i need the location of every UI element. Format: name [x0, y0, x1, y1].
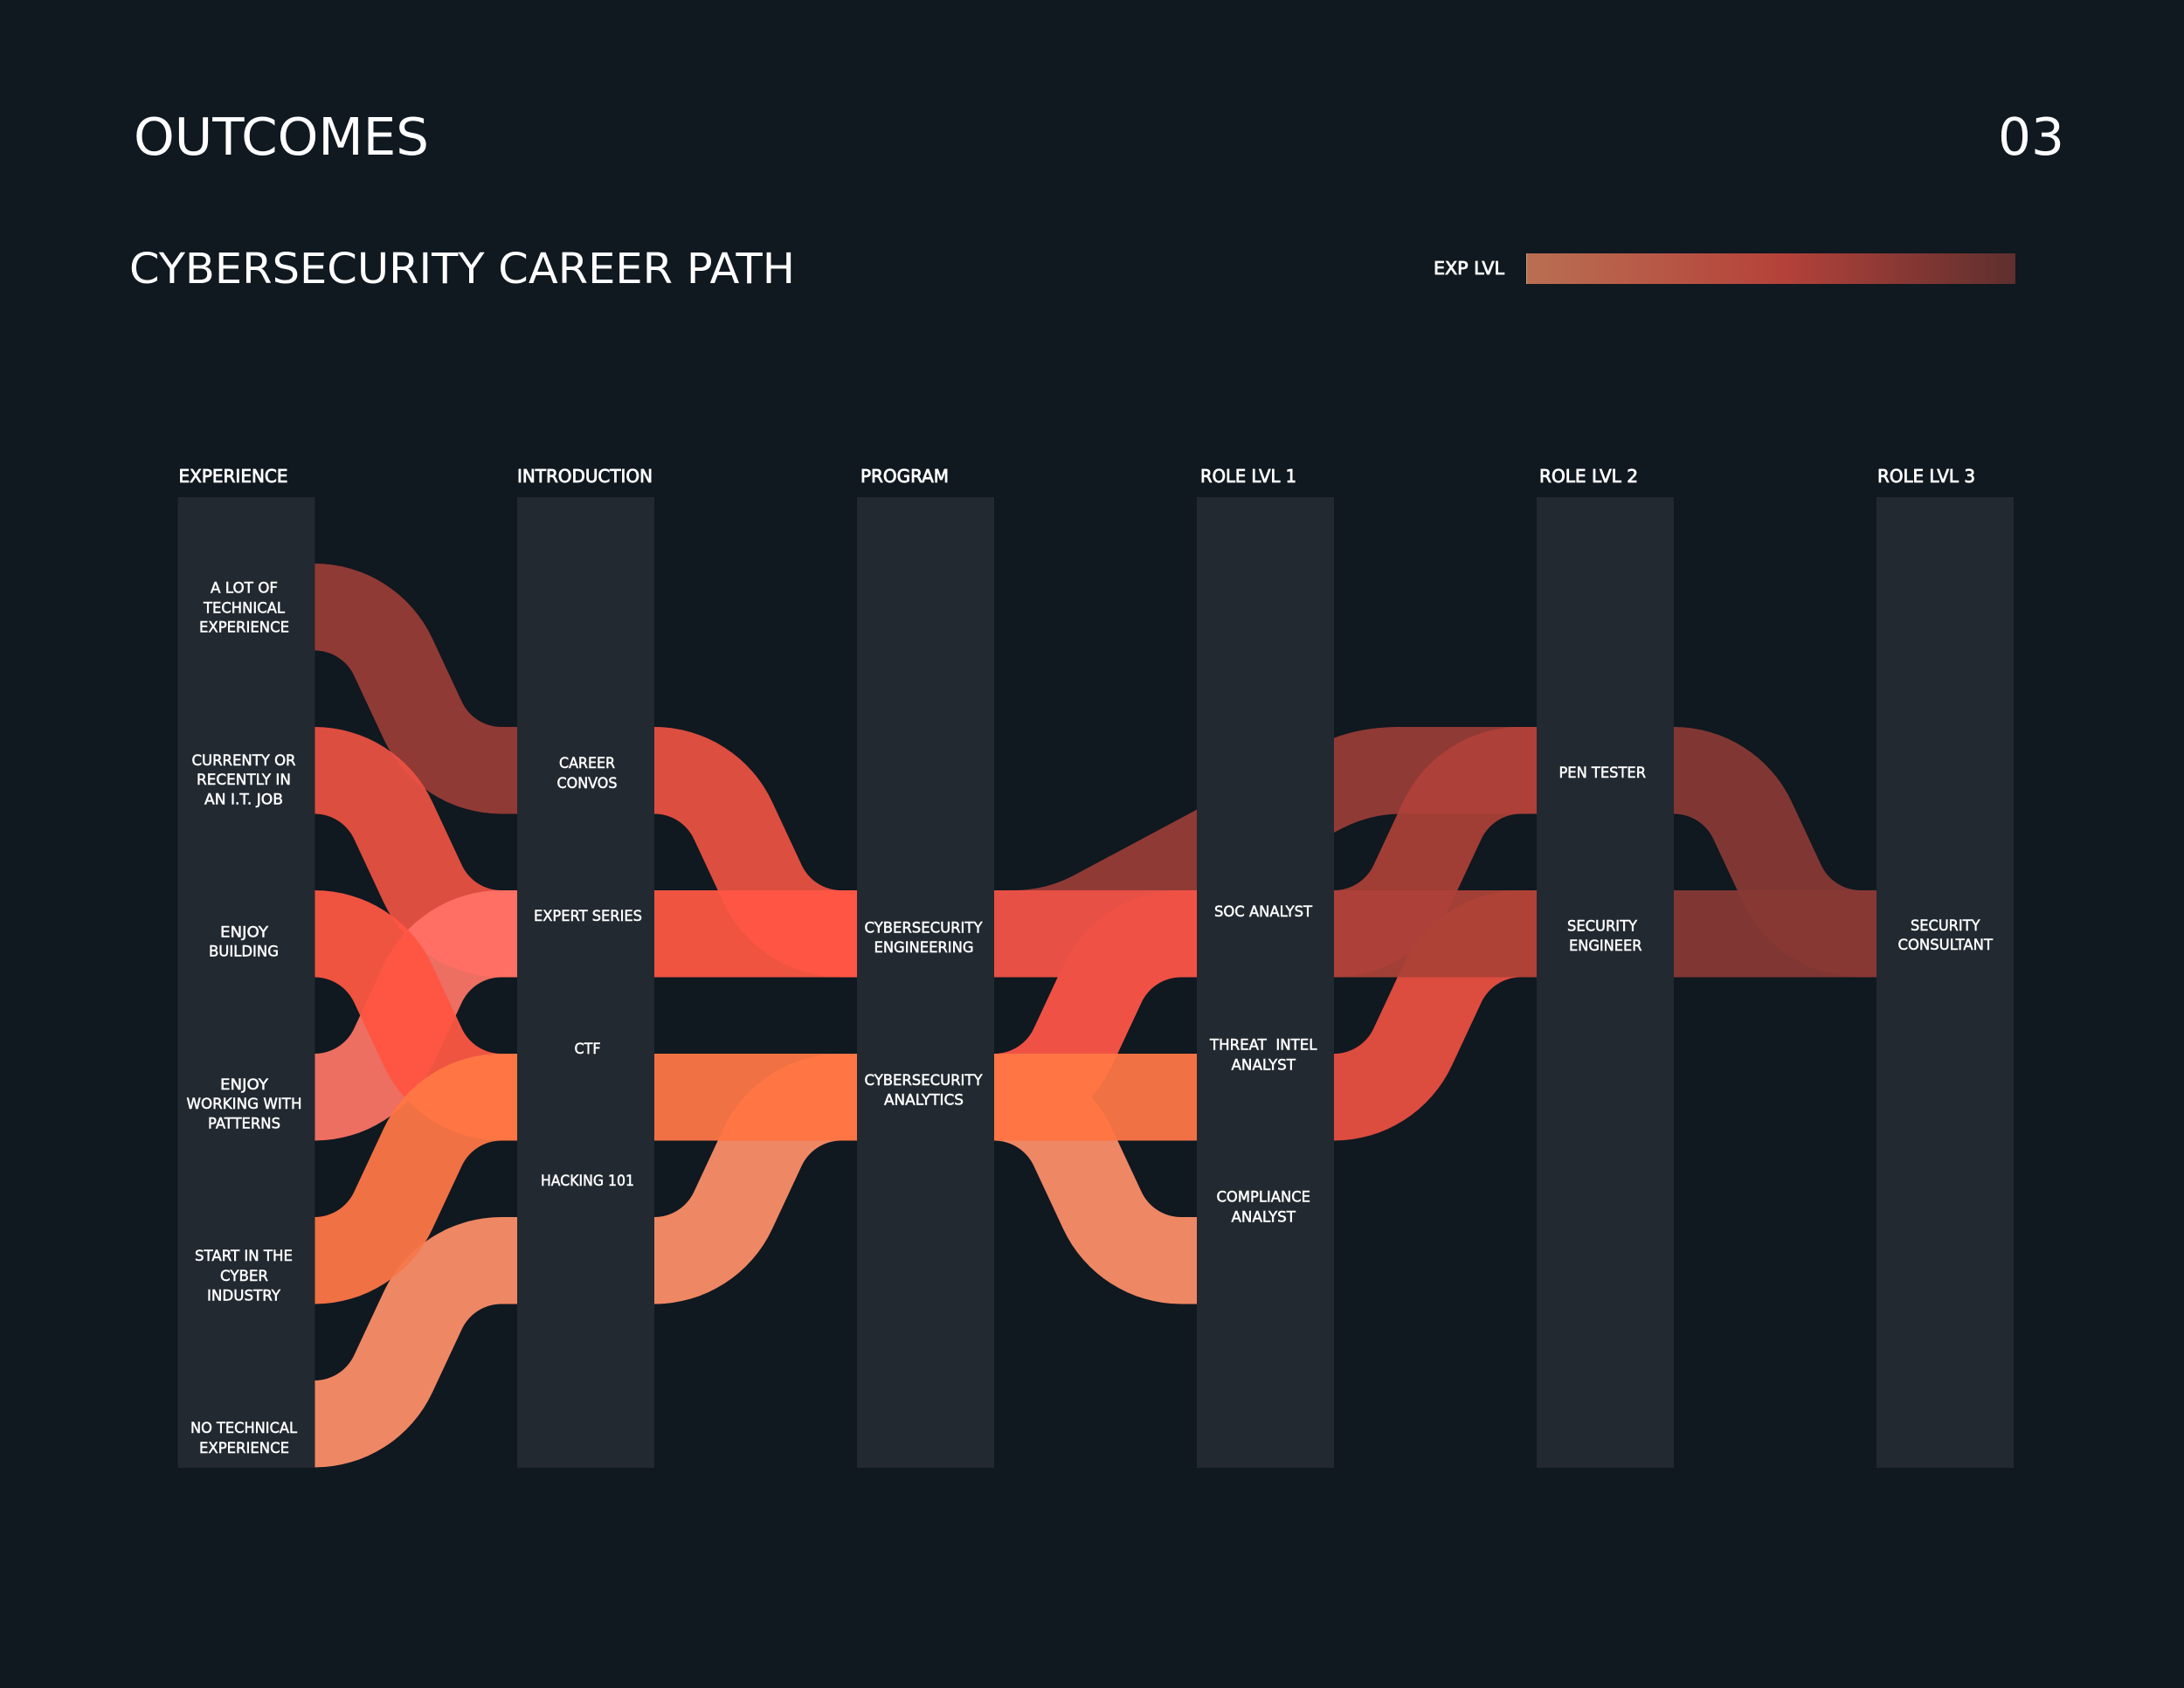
- legend: experience level: EXP LVL: [1434, 258, 1505, 279]
- label: enjoy working with patterns: [187, 1076, 302, 1133]
- flows: role level 1 to role level 2: [1334, 727, 1538, 1141]
- label: pen tester: PEN TESTER: [1559, 764, 1646, 782]
- label: compliance analyst: [1216, 1189, 1310, 1227]
- label: a lot of technical experience: A LOT OF: [211, 580, 278, 598]
- overlap: SOC band and SOC to pen tester: [1334, 890, 1457, 977]
- column heading: introduction: INTRODUCTION: [517, 466, 653, 487]
- flow: a lot of technical experience to career convos: [314, 564, 518, 814]
- flow: currently in IT to expert series: [314, 727, 518, 977]
- overlap: fourth and fifth flow: [390, 1097, 408, 1117]
- label: cybersecurity analytics: [865, 1072, 983, 1110]
- label: start in the cyber industry: START IN THE: [195, 1248, 293, 1265]
- label: security engineer: SECURITY: [1567, 918, 1638, 936]
- label: no technical experience: [190, 1420, 298, 1457]
- overlap: analytics to compliance over threat intel band: [999, 1097, 1117, 1141]
- label: compliance analyst: COMPLIANCE: [1216, 1189, 1310, 1207]
- label: cybersecurity analytics: CYBERSECURITY: [865, 1072, 983, 1090]
- overlap: engineering path and SOC to pen tester: [1398, 727, 1537, 814]
- label: a lot of technical experience: EXPERIENCE: [199, 619, 289, 636]
- column: introduction: [517, 497, 654, 1468]
- label: threat intel analyst: THREAT INTEL: [1209, 1036, 1317, 1054]
- column: role level 1: [1197, 497, 1334, 1468]
- flow: security engineer to security consultant: [1674, 890, 1877, 977]
- label: a lot of technical experience: TECHNICAL: [203, 599, 286, 617]
- flow: analytics to threat intel: [994, 1054, 1198, 1141]
- label: enjoy working with patterns: PATTERNS: [208, 1116, 280, 1133]
- label: cybersecurity engineering: ENGINEERING: [874, 939, 973, 957]
- label: security consultant: [1897, 917, 1994, 954]
- legend: experience level: [1434, 253, 2015, 284]
- overlap: SOC band and threat intel path: [1398, 890, 1537, 977]
- label: no technical experience: EXPERIENCE: [199, 1440, 289, 1457]
- column heading: program: PROGRAM: [860, 466, 949, 487]
- label: cybersecurity engineering: CYBERSECURITY: [865, 920, 983, 937]
- label: enjoy building: [209, 924, 279, 961]
- flow: analytics to compliance: [994, 1054, 1198, 1304]
- flow: threat intel to security engineer: [1334, 890, 1538, 1141]
- label: enjoy working with patterns: ENJOY: [220, 1076, 269, 1094]
- flow: analytics to SOC analyst: [994, 890, 1198, 1141]
- label: currenty or recently in an IT job: AN I.T. JOB: [204, 792, 283, 809]
- flow: engineering to pen tester, passing behind SOC analyst: [1013, 727, 1538, 909]
- column heading: role level 3: ROLE LVL 3: [1877, 466, 1975, 487]
- label: no technical experience: NO TECHNICAL: [190, 1420, 298, 1437]
- column heading: role level 2: ROLE LVL 2: [1539, 466, 1638, 487]
- flow: enjoy patterns to expert series: [314, 890, 518, 1141]
- flow: no technical experience to hacking 101: [314, 1217, 518, 1468]
- flow: CTF to analytics: [654, 1054, 858, 1141]
- label: CTF: CTF: [575, 1041, 601, 1058]
- label: start in the cyber industry: [195, 1248, 293, 1305]
- title: outcomes: OUTCOMES: [134, 107, 429, 167]
- label: a lot of technical experience: [199, 580, 289, 636]
- label: career convos: CONVOS: [557, 775, 617, 792]
- flows: experience to introduction: [314, 564, 518, 1468]
- label: security consultant: CONSULTANT: [1897, 937, 1994, 954]
- flow: engineering to SOC analyst: [994, 890, 1198, 977]
- overlap: third and fourth flow: [360, 930, 456, 1097]
- label: threat intel analyst: ANALYST: [1232, 1057, 1296, 1075]
- flow: SOC analyst to security engineer: [1334, 890, 1538, 977]
- label: expert series: EXPERT SERIES: [534, 908, 642, 925]
- label: security engineer: [1567, 918, 1642, 955]
- overlap: second and third flow: [390, 915, 408, 933]
- label: SOC analyst: SOC ANALYST: [1214, 903, 1313, 921]
- label: cybersecurity engineering: [865, 920, 983, 957]
- flow: start in cyber to CTF: [314, 1054, 518, 1304]
- label: currenty or recently in an IT job: CURRENTY OR: [192, 752, 296, 770]
- page number: 03: [1998, 107, 2064, 167]
- flow: pen tester to security consultant: [1674, 727, 1877, 977]
- flow: SOC analyst to pen tester: [1334, 727, 1538, 977]
- label: enjoy building: BUILDING: [209, 944, 279, 961]
- label: security consultant: SECURITY: [1911, 917, 1980, 935]
- label: enjoy building: ENJOY: [220, 924, 269, 942]
- overlap: first and second flow: [390, 751, 425, 789]
- label: start in the cyber industry: CYBER: [220, 1268, 268, 1285]
- overlap: analytics to SOC over threat intel band: [1001, 1054, 1117, 1097]
- column: role level 3: [1876, 497, 2014, 1468]
- label: cybersecurity analytics: ANALYTICS: [884, 1092, 964, 1110]
- label: currenty or recently in an IT job: RECENTLY IN: [197, 771, 291, 789]
- flows: program to role level 1: [994, 727, 1538, 1304]
- label: currenty or recently in an IT job: [192, 752, 296, 809]
- overlap: converging consultant flows: [1674, 890, 1877, 977]
- overlap: CTF and hacking 101: [718, 1054, 857, 1141]
- flow: hacking 101 to analytics: [654, 1054, 858, 1304]
- heading: cybersecurity career path: CYBERSECURITY CAREER PATH: [129, 245, 795, 294]
- label: hacking 101: HACKING 101: [541, 1173, 634, 1190]
- label: security engineer: ENGINEER: [1569, 937, 1642, 955]
- flow: expert series to engineering: [654, 890, 858, 977]
- column heading: role level 1: ROLE LVL 1: [1200, 466, 1296, 487]
- overlap: third and fifth flow: [408, 1054, 517, 1141]
- label: compliance analyst: ANALYST: [1232, 1209, 1296, 1227]
- flows: introduction to program: [654, 727, 858, 1304]
- label: threat intel analyst: [1209, 1036, 1317, 1075]
- label: career convos: [557, 755, 617, 792]
- column: program: [857, 497, 994, 1468]
- label: enjoy working with patterns: WORKING WITH: [187, 1096, 302, 1113]
- flow: enjoy building to CTF: [314, 890, 518, 1141]
- flow: career convos to engineering: [654, 727, 858, 977]
- flows: role level 2 to role level 3: [1674, 727, 1877, 977]
- label: career convos: CAREER: [559, 755, 615, 772]
- overlap: career convos and expert series: [718, 890, 857, 977]
- column: role level 2: [1537, 497, 1674, 1468]
- column heading: experience: EXPERIENCE: [178, 466, 288, 487]
- label: start in the cyber industry: INDUSTRY: [207, 1288, 281, 1305]
- column: experience: [178, 497, 314, 1468]
- overlap: second and fourth flow: [408, 890, 517, 977]
- overlap: fifth and sixth flow: [391, 1242, 425, 1279]
